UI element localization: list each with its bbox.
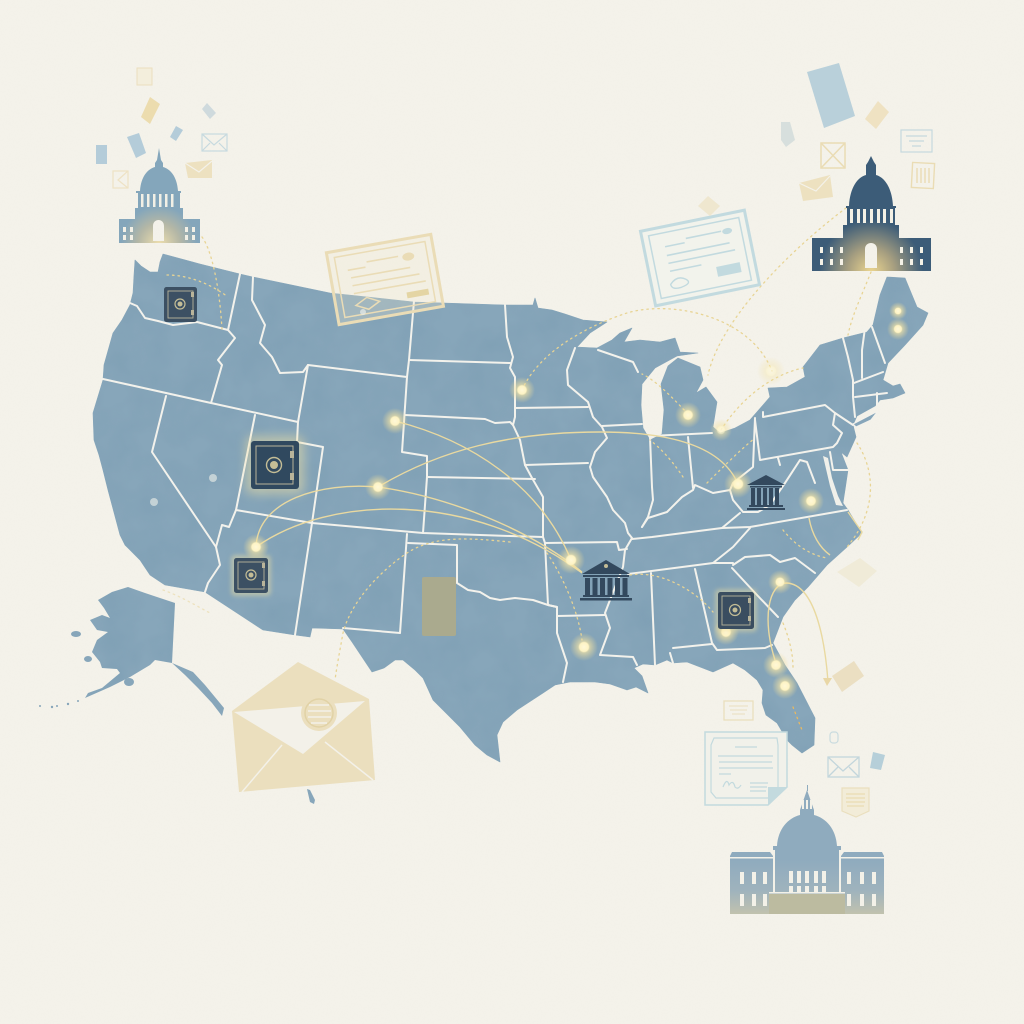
tan tag near bottom capitol	[842, 788, 869, 817]
map: Alaska	[39, 587, 315, 804]
map glow dots	[150, 302, 909, 699]
certificate: pale blue bottom	[705, 732, 787, 805]
top-right floating papers	[698, 63, 935, 216]
capitol: bottom-right pale	[730, 785, 884, 914]
map: Long Island	[853, 411, 878, 427]
floating tan sheets east of Florida	[823, 558, 877, 692]
small tan document above bottom certificate	[724, 701, 753, 720]
capitol: top-left light blue	[119, 148, 200, 243]
map: Chesapeake Bay	[823, 456, 843, 506]
envelope: pale blue bottom	[828, 757, 859, 777]
envelope: large tan	[232, 662, 375, 792]
map: contiguous United States	[39, 254, 928, 804]
small outlined oval	[830, 732, 838, 743]
pale blue chip	[870, 752, 885, 770]
safe: Utah, large	[246, 436, 304, 494]
certificate: blue top-right	[640, 210, 760, 306]
safe: Georgia	[715, 589, 757, 632]
safe: Washington	[164, 287, 197, 322]
bank icon: Arkansas	[580, 560, 632, 600]
safe: Arizona	[231, 555, 271, 596]
gold rectangle document over Texas panhandle	[422, 577, 456, 636]
capitol: top-right dark navy	[812, 156, 931, 271]
bank icon: Virginia	[747, 475, 785, 510]
routes: dotted gold lines	[163, 208, 871, 730]
top-left floating papers	[96, 68, 227, 188]
map: state borders	[103, 274, 887, 682]
certificate: gold top-left	[326, 234, 443, 325]
routes: solid gold arcs	[256, 421, 862, 682]
